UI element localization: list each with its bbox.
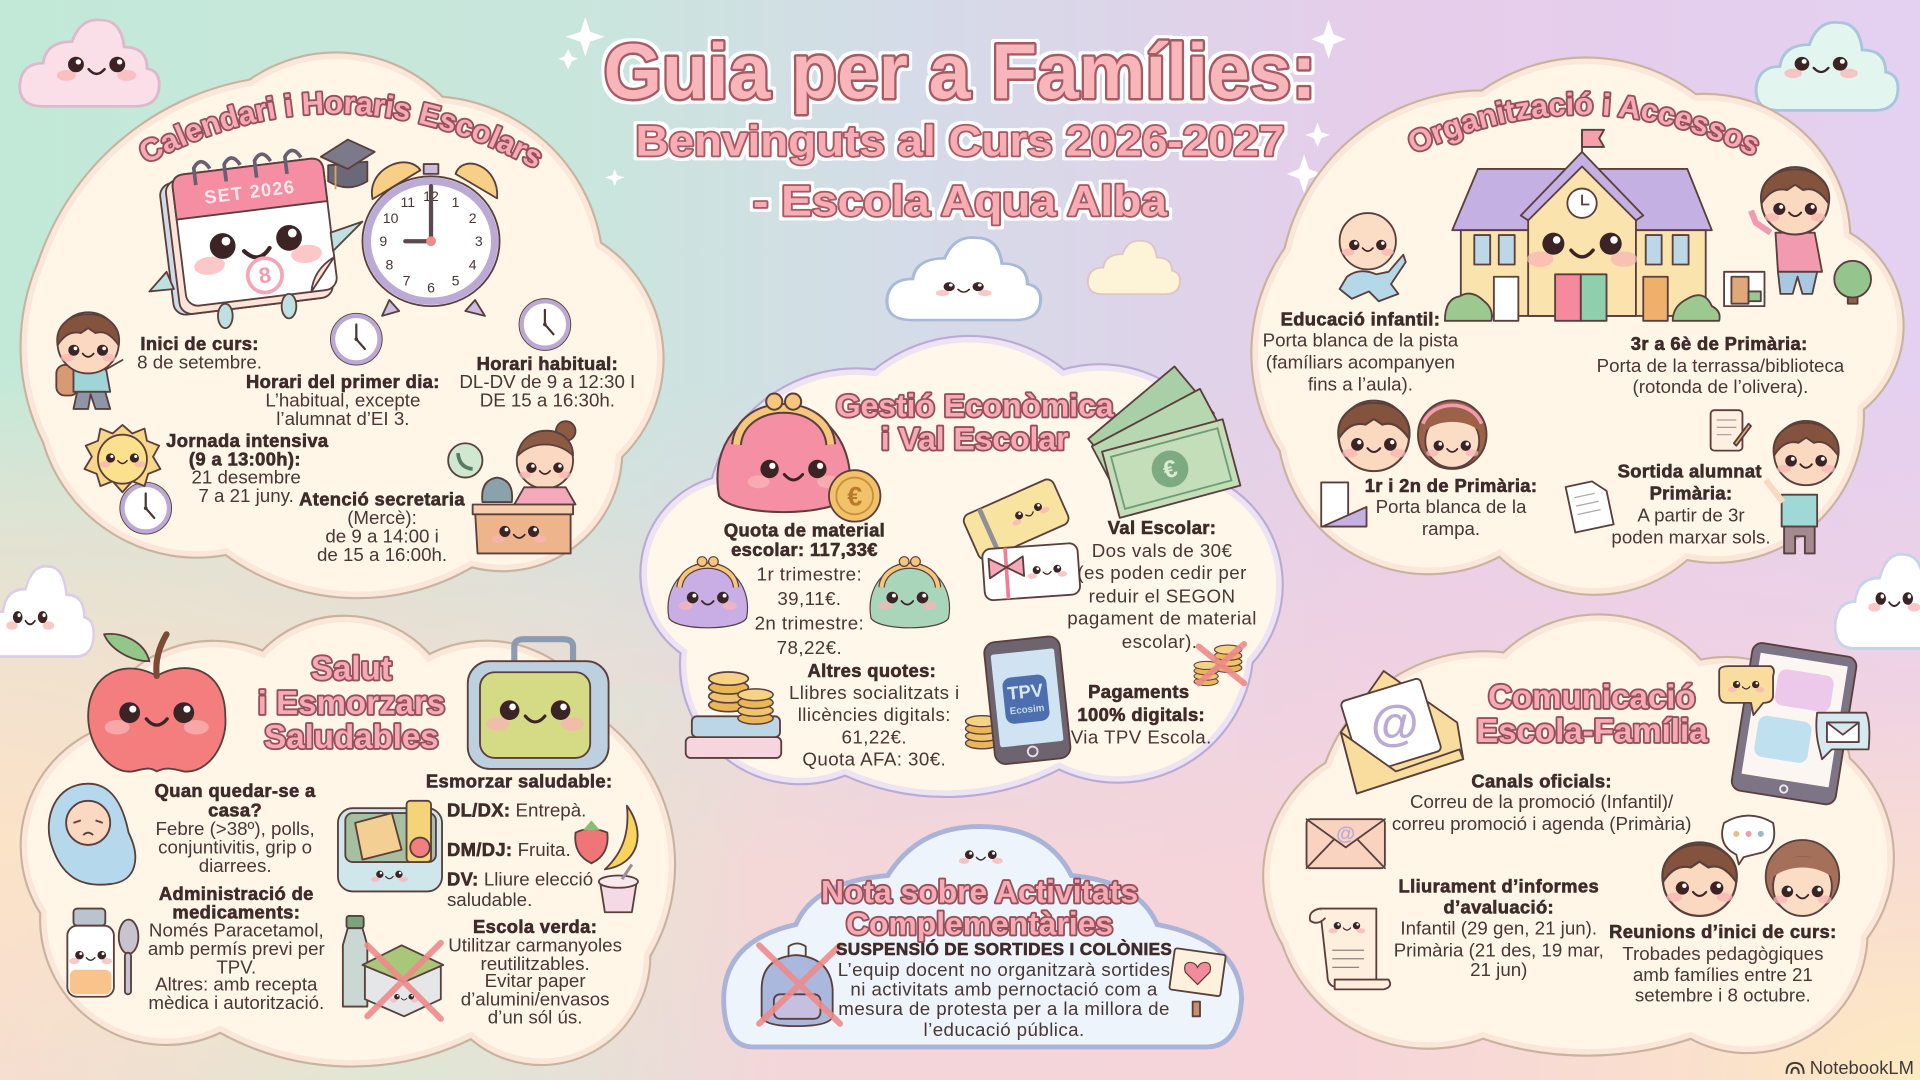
panel heading: Comunicació (1488, 679, 1696, 716)
text: educacio infantil: Porta blanca de la pista (1263, 330, 1459, 351)
panel shape (644, 340, 1279, 793)
text: altres quotes: llicències digitals: (798, 704, 951, 725)
icon: document with pen (1711, 410, 1751, 451)
text: escola verda: Escola verda: (473, 916, 597, 937)
icon: phone TPV: TPV (1006, 679, 1045, 704)
text: horari primer dia: l’alumnat d’EI 3. (276, 408, 409, 429)
text: inici de curs (137, 333, 262, 373)
icon: alarm clock: 3 (475, 233, 483, 249)
text: esmorzar saludable (426, 770, 612, 910)
text: escola verda: d’un sól ús. (488, 1007, 582, 1028)
text: lliurament d'informes: Primària (21 des, 19 mar, (1394, 939, 1604, 960)
panel heading: Organització i Accessos (1408, 90, 1760, 156)
text: lliurament d'informes: 21 jun) (1470, 959, 1527, 980)
text: inici de curs: Inici de curs: (140, 333, 259, 354)
text: reunions d'inici de curs: Trobades pedagògiques (1622, 943, 1823, 964)
icon: door and ramp (1321, 482, 1367, 527)
text: quan quedar-se a casa: diarrees. (199, 855, 272, 876)
sparkles (558, 17, 1346, 193)
text: administracio de medicaments: Altres: amb recepta (155, 974, 318, 995)
icon: two children (1338, 400, 1487, 471)
text: horari primer dia: L’habitual, excepte (265, 390, 420, 411)
text: altres quotes: 61,22€. (842, 726, 907, 747)
icon: small envelope (1307, 819, 1385, 868)
NotebookLM watermark: NotebookLM (1810, 1057, 1914, 1078)
text: suspensio de sortides: mesura de protesta per a la millora de (838, 998, 1170, 1019)
text: atencio secretaria (299, 489, 465, 565)
text: sortida alumnat: poden marxar sols. (1611, 527, 1771, 548)
icon: alarm clock: 6 (427, 280, 435, 296)
icon: baby (1340, 213, 1406, 301)
text: atencio secretaria: de 15 a 16:00h. (317, 544, 447, 565)
panel heading: Escola-Família (1476, 713, 1708, 750)
decorative cloud: white left (0, 566, 94, 657)
icon: apple (88, 634, 226, 772)
icon: alarm clock: 7 (403, 272, 411, 288)
icon: crossed coins (1194, 644, 1244, 686)
icon: coins near phone (966, 716, 999, 749)
text: sortida alumnat (1611, 461, 1771, 548)
icon: big envelope (1340, 671, 1463, 793)
panel heading: Calendari i Horaris Escolars (138, 90, 542, 168)
text: administracio de medicaments: TPV. (216, 956, 256, 977)
text: suspensio de sortides: l’educació pública. (924, 1019, 1085, 1040)
icon: alarm clock: 5 (452, 272, 460, 288)
text: escola verda: d’alumini/envasos (461, 988, 610, 1009)
text: sortida alumnat: Primària: (1650, 483, 1732, 504)
icon: tablet with messages (1730, 642, 1858, 806)
text: 1r i 2n: rampa. (1422, 518, 1480, 539)
text: val escolar: (es poden cedir per (1077, 562, 1247, 583)
text: sortida alumnat: A partir de 3r (1637, 505, 1745, 526)
text: administracio de medicaments (148, 883, 325, 1013)
decorative cloud: white center (887, 238, 1041, 320)
text: altres quotes: Altres quotes: (808, 660, 936, 681)
subtitle line 2: - Escola Aqua Alba (753, 178, 1168, 226)
text: esmorzar saludable: Esmorzar saludable: (426, 770, 612, 791)
panel shape (1255, 61, 1900, 591)
text: altres quotes: Quota AFA: 30€. (802, 748, 946, 769)
text: administracio de medicaments: amb permís previ per (148, 938, 325, 959)
decorative cloud: mint top right (1756, 22, 1898, 110)
icon: lunchbox (468, 639, 609, 769)
text: quota de material: escolar: 117,33€ (731, 539, 878, 560)
icon: banknotes: € (1160, 455, 1181, 485)
icon: euro coin: € (847, 482, 862, 512)
text: atencio secretaria: (Mercè): (347, 507, 417, 528)
icon: pink purse (717, 394, 850, 512)
icon: strawberry and banana (575, 806, 638, 869)
text: pagaments digitals: Pagaments (1088, 681, 1189, 702)
text: val escolar: Val Escolar: (1108, 517, 1216, 538)
panel heading (836, 387, 1114, 456)
text: 1r i 2n: Porta blanca de la (1376, 496, 1527, 517)
text: escola verda: Utilitzar carmanyoles (448, 934, 622, 955)
icon: green purse (870, 557, 950, 628)
text: reunions d'inici de curs: amb famílies entre 21 (1633, 964, 1813, 985)
icon: small clock 3 (120, 482, 171, 534)
text: lliurament d'informes (1394, 876, 1604, 980)
icon: mail bubble (1816, 713, 1869, 759)
icon: purple purse (668, 557, 748, 628)
text: sortida alumnat: Sortida alumnat (1618, 461, 1762, 482)
icon: small clock 2 (519, 299, 571, 350)
text: canals oficials: correu promoció i agenda (Primària) (1392, 813, 1691, 834)
panel: gestio economica (644, 340, 1279, 793)
text: 1r i 2n (1365, 475, 1537, 539)
icon: boy with backpack (56, 312, 122, 409)
icon: yellow chat bubble (1719, 666, 1774, 715)
text: 3r a 6e (1597, 333, 1845, 397)
text: quan quedar-se a casa: Febre (>38º), polls, (155, 818, 315, 839)
icon: yogurt (599, 864, 638, 912)
text: val escolar: escolar). (1122, 631, 1197, 652)
text: quan quedar-se a casa: conjuntivitis, grip o (158, 836, 312, 857)
text: 3r a 6e: Porta de la terrassa/biblioteca (1597, 355, 1845, 376)
icon: small clock 1 (331, 313, 382, 365)
panel heading: Gestió Econòmica (836, 387, 1114, 423)
icon: open door (1724, 272, 1764, 306)
icon: sun (84, 425, 160, 492)
panel shape (1267, 618, 1890, 1052)
icon: phone TPV: Ecosim (1009, 703, 1045, 717)
icon: calendar: 8 (257, 262, 272, 288)
text: educacio infantil: fins a l’aula). (1308, 374, 1413, 395)
text: escola verda (448, 916, 622, 1028)
text: val escolar: reduir el SEGON (1089, 585, 1235, 606)
panel heading: i Val Escolar (881, 420, 1068, 456)
text: esmorzar saludable: DM/DJ: Fruita. (447, 839, 571, 860)
text: quan quedar-se a casa: casa? (208, 800, 262, 821)
text: val escolar: pagament de material (1067, 607, 1257, 628)
text: lliurament d'informes: d’avaluació: (1444, 896, 1554, 917)
icon: medicine bottle (67, 909, 138, 997)
icon: crossed backpack (759, 943, 840, 1026)
icon: alarm clock: 1 (452, 194, 460, 210)
text: quota de material: 39,11€. (777, 588, 841, 609)
text: esmorzar saludable: DL/DX: Entrepà. (447, 800, 586, 821)
text: educacio infantil (1263, 309, 1459, 395)
text: jornada intensiva: Jornada intensiva (166, 430, 329, 451)
text: quan quedar-se a casa: Quan quedar-se a (155, 780, 316, 801)
text: administracio de medicaments: medicaments: (172, 901, 300, 922)
icon: scroll (1310, 909, 1390, 989)
icon: heart sign (1169, 948, 1226, 1016)
icon: books and coins (686, 672, 781, 758)
text: pagaments digitals: 100% digitals: (1077, 704, 1205, 725)
icon: boy waving pink (1751, 167, 1829, 294)
icon: calendar (157, 147, 339, 316)
text: pagaments digitals: Via TPV Escola. (1071, 726, 1212, 747)
icon: calendar: SET 2026 (203, 176, 296, 208)
panel shape (724, 827, 1242, 1047)
text: quota de material: 78,22€. (777, 637, 842, 658)
text: quota de material: Quota de material (724, 519, 885, 540)
text: atencio secretaria: de 9 a 14:00 i (325, 525, 439, 546)
icon: calendar arm and feet (149, 222, 362, 328)
text: horari primer dia (246, 371, 440, 429)
text: canals oficials: Canals oficials: (1471, 770, 1612, 791)
text: esmorzar saludable: saludable. (447, 889, 532, 910)
text: horari habitual: DL-DV de 9 a 12:30 I (459, 371, 635, 392)
icon: bento box (338, 801, 442, 891)
text: canals oficials: Correu de la promoció (Infantil)/ (1410, 791, 1674, 812)
icon: small envelope: @ (1336, 823, 1355, 845)
text: horari habitual: DE 15 a 16:30h. (480, 390, 615, 411)
text: escola verda: reutilitzables. (480, 953, 590, 974)
panel heading: Nota sobre Activitats (821, 873, 1138, 909)
icon: parents talking (1662, 816, 1839, 916)
text: 3r a 6e: 3r a 6è de Primària: (1631, 333, 1808, 354)
text: atencio secretaria: Atenció secretaria (299, 489, 465, 510)
text: jornada intensiva (166, 430, 329, 506)
panel shape (24, 620, 671, 1063)
panel heading (1476, 679, 1708, 750)
text: administracio de medicaments: mèdica i autorització. (148, 992, 324, 1013)
panel shape (24, 56, 660, 594)
text: reunions d'inici de curs: setembre i 8 octubre. (1635, 985, 1811, 1006)
text: canals oficials (1392, 770, 1691, 834)
text: altres quotes: Llibres socialitzats i (789, 682, 960, 703)
icon: big envelope: @ (1371, 697, 1419, 751)
panel heading: Complementàries (846, 905, 1113, 941)
text: altres quotes (789, 660, 960, 769)
panel: salut i esmorzars (24, 620, 671, 1063)
icon: alarm clock: 12 (423, 188, 439, 204)
icon: euro coin (829, 470, 880, 522)
decorative cloud: cream center (1088, 241, 1180, 294)
icon: alarm clock: 9 (379, 233, 387, 249)
icon: sick baby (49, 784, 135, 885)
panel: nota activitats complementaries (724, 827, 1242, 1047)
icon: yellow gift card (961, 477, 1071, 562)
text: escola verda: Evitar paper (485, 970, 586, 991)
icon: graduation cap (321, 140, 375, 189)
text: suspensio de sortides: ni activitats amb pernoctació com a (850, 979, 1158, 1000)
panel: comunicacio escola-familia (1267, 618, 1890, 1052)
text: val escolar (1067, 517, 1257, 652)
text: reunions d'inici de curs: Reunions d’inici de curs: (1609, 921, 1837, 942)
icon: alarm clock: 8 (385, 256, 393, 272)
text: lliurament d'informes: Infantil (29 gen, 21 jun). (1400, 917, 1597, 938)
text: quota de material: 2n trimestre: (755, 612, 864, 633)
text: administracio de medicaments: Administració de (159, 883, 314, 904)
decorative cloud: white right (1835, 554, 1920, 648)
icon: phone TPV (983, 635, 1071, 765)
icon: alarm clock: 2 (469, 210, 477, 226)
text: horari habitual (459, 353, 635, 411)
icon: boy teal shirt (1766, 421, 1839, 553)
text: educacio infantil: (famíliars acompanyen (1266, 352, 1455, 373)
text: inici de curs: 8 de setembre. (137, 352, 262, 373)
text: jornada intensiva: (9 a 13:00h): (189, 448, 301, 469)
icon: cloud face (959, 850, 1003, 864)
text: pagaments digitals (1071, 681, 1212, 747)
text: esmorzar saludable: DV: Lliure elecció (447, 868, 593, 889)
icon: alarm clock: 4 (469, 256, 477, 272)
panel: organitzacio i accessos (1250, 56, 1905, 596)
text: suspensio de sortides: SUSPENSIÓ DE SORTIDES I COLÒNIES (836, 939, 1172, 959)
icon: alarm clock: 11 (400, 194, 415, 210)
panel heading (821, 873, 1138, 941)
text: suspensio de sortides: L’equip docent no organitzarà sortides (838, 959, 1170, 980)
title: Guia per a Famílies: (604, 27, 1316, 115)
text: quota de material: 1r trimestre: (757, 563, 862, 584)
icon: secretary at desk (473, 421, 576, 553)
icon: crossed bottle and box (343, 916, 443, 1019)
decorative cloud: pink top left (20, 20, 159, 106)
icon: signed paper (1566, 479, 1614, 533)
text: 3r a 6e: (rotonda de l’olivera). (1632, 376, 1808, 397)
panel heading (258, 651, 445, 756)
text: 1r i 2n: 1r i 2n de Primària: (1365, 475, 1537, 496)
panel heading: i Esmorzars (258, 685, 445, 722)
text: reunions d'inici de curs (1609, 921, 1837, 1006)
text: administracio de medicaments: Només Paracetamol, (149, 920, 324, 941)
text: educacio infantil: Educació infantil: (1281, 309, 1440, 330)
text: jornada intensiva: 21 desembre (191, 467, 301, 488)
text: quan quedar-se a casa (155, 780, 316, 876)
text: lliurament d'informes: Lliurament d’informes (1399, 876, 1599, 897)
text: val escolar: Dos vals de 30€ (1092, 540, 1233, 561)
icon: school building (1445, 130, 1720, 321)
panel heading: Salut (311, 651, 392, 688)
icon: banknotes (1088, 366, 1240, 518)
icon: phone bubble (448, 443, 482, 478)
icon: alarm clock (362, 160, 500, 316)
panel heading: Saludables (264, 719, 439, 756)
text: jornada intensiva: 7 a 21 juny. (198, 485, 294, 506)
text: horari habitual: Horari habitual: (477, 353, 618, 374)
subtitle line 1: Benvinguts al Curs 2026-2027 (636, 118, 1284, 166)
text: suspensio de sortides (836, 939, 1172, 1040)
icon: white gift card (982, 543, 1081, 601)
icon: tree (1834, 261, 1871, 304)
icon: alarm clock: 10 (383, 210, 399, 226)
text: horari primer dia: Horari del primer dia: (246, 371, 440, 392)
panel: calendari i horaris (20, 51, 665, 600)
text: quota de material (724, 519, 885, 658)
